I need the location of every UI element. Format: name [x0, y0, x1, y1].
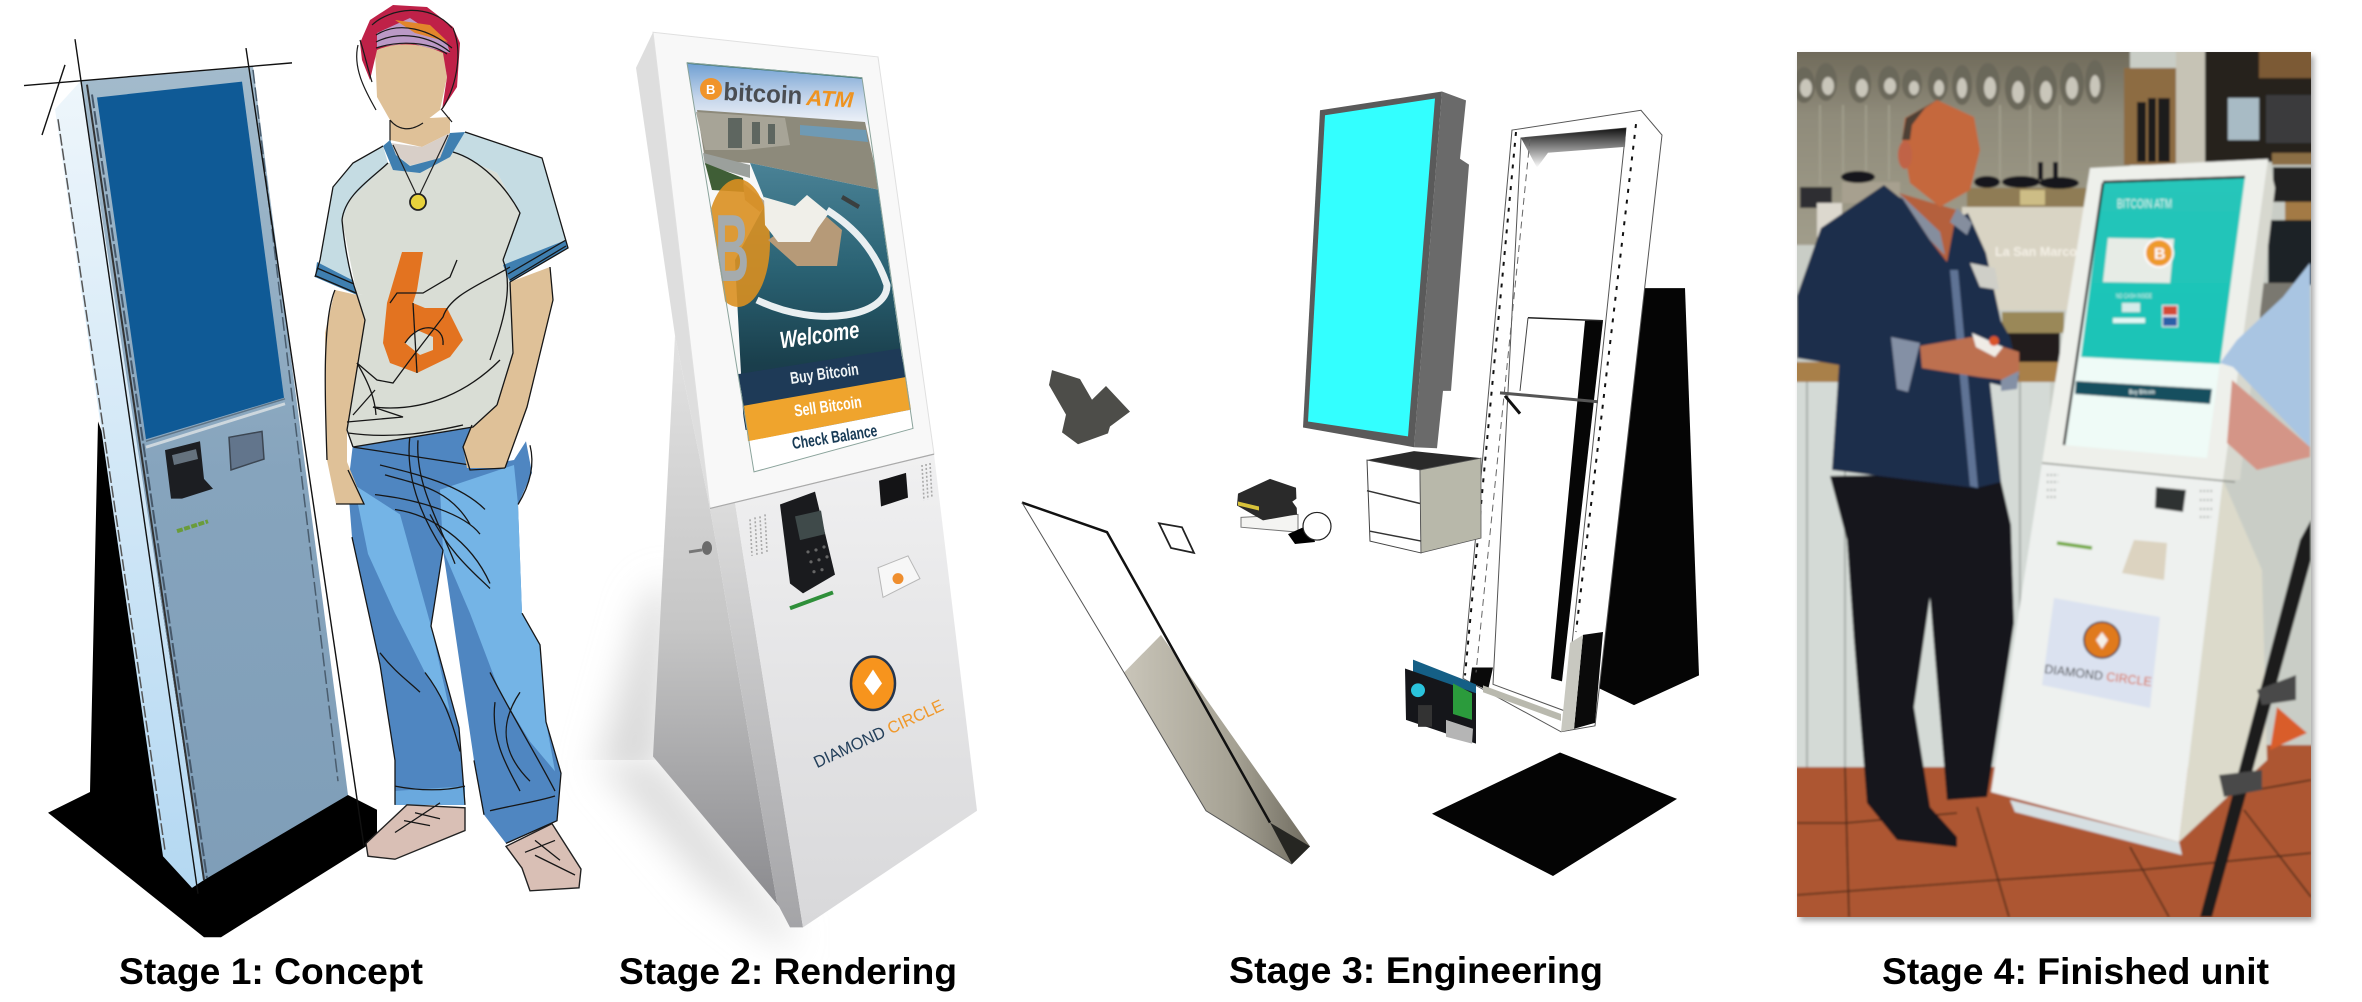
- hanging wine glasses: [1793, 60, 2105, 110]
- nfc reader: [879, 473, 908, 506]
- diamond circle wordmark: DIAMOND CIRCLE: [811, 696, 946, 772]
- hair and headband: [360, 5, 460, 110]
- necklace pendant: [393, 135, 448, 210]
- dark cabinet: [2205, 50, 2315, 162]
- photo scene: [1790, 45, 2320, 925]
- pants and shoes: [348, 421, 581, 891]
- lower kiosk hardware: [689, 463, 946, 772]
- sell bitcoin button: Sell Bitcoin: [793, 392, 863, 421]
- speaker grilles: [750, 463, 932, 556]
- espresso machine: La San Marco: [1995, 244, 2077, 259]
- receipt printer: [1237, 479, 1331, 544]
- buy bitcoin button: Buy Bitcoin: [789, 360, 860, 388]
- black rear shell: [1597, 288, 1699, 705]
- bitcoin ATM header: bitcoin: [723, 78, 803, 110]
- kiosk wall and floor shadow: [595, 580, 790, 950]
- receipt tray: [2122, 540, 2167, 580]
- welcome text: Welcome: [778, 317, 861, 354]
- white frame: [1463, 110, 1662, 732]
- photo shadow: [1800, 56, 2314, 921]
- reader display: [172, 449, 198, 465]
- check balance button: Check Balance: [791, 421, 879, 453]
- bitcoin ATM header: ATM: [805, 85, 855, 112]
- sketched kiosk: [24, 39, 377, 937]
- panel: stage 2 rendering: [619, 32, 977, 992]
- black pots and bottles: [1841, 162, 2079, 189]
- sketch construction lines: [24, 39, 364, 894]
- green card slot: [790, 592, 833, 608]
- kiosk screen: B: [2154, 246, 2166, 263]
- bar counter: [1790, 362, 2060, 382]
- orange cone: [2270, 707, 2307, 750]
- panel: stage 4 finished unit photo: [1790, 45, 2320, 992]
- kiosk screen: NO CASH INSIDE: [2116, 294, 2152, 300]
- opera house platform: [768, 217, 842, 266]
- neck and face: [375, 41, 450, 147]
- kiosk touchscreen photo: [687, 63, 915, 430]
- orange logo: [383, 252, 463, 373]
- stage 1 label: Stage 1: Concept: [119, 951, 423, 992]
- card reader: [165, 441, 213, 499]
- electronics module: [1405, 660, 1476, 744]
- key in lock: [689, 541, 712, 555]
- pin pad reader: [780, 492, 835, 593]
- small card part: [1159, 523, 1194, 553]
- receipt tray: [878, 556, 920, 597]
- printer box: [1367, 451, 1481, 553]
- stage 3 label: Stage 3: Engineering: [1229, 950, 1603, 991]
- kiosk buttons: [687, 63, 913, 472]
- kiosk screen: BITCOIN ATM: [2117, 196, 2172, 211]
- finished kiosk: [1991, 159, 2275, 855]
- rendered kiosk: [636, 32, 977, 927]
- kiosk screen: [2064, 177, 2245, 458]
- green card slot: [177, 521, 208, 531]
- black rear sliver: [1551, 321, 1603, 681]
- espresso machine: [1800, 182, 2087, 363]
- green slot: [2057, 543, 2092, 548]
- t-shirt: [342, 152, 520, 447]
- panel: stage 3 engineering: [1022, 92, 1699, 991]
- panel: stage 1 concept: [24, 5, 581, 992]
- harbour ferry: [841, 195, 860, 209]
- boat wake: [757, 210, 887, 316]
- bitcoin watermark coin: [706, 179, 770, 307]
- bitcoin logo coin: [700, 78, 722, 100]
- door panel: [1022, 503, 1310, 864]
- terracotta floor: [1790, 767, 2320, 922]
- diamond circle sticker: [2042, 598, 2160, 708]
- bystander arm: [2220, 263, 2310, 470]
- sketch outlines: [315, 132, 568, 504]
- diamond circle logo: [851, 657, 895, 710]
- wine shelf: [2124, 68, 2176, 165]
- bitcoin ATM header: [723, 78, 855, 112]
- stage 2 label: Stage 2: Rendering: [619, 951, 957, 992]
- back wall: [1790, 45, 2130, 245]
- diamond circle sticker: DIAMOND CIRCLE: [2044, 662, 2153, 689]
- nfc reader: [2155, 487, 2186, 512]
- bitcoin logo coin: B: [706, 82, 715, 97]
- black base plate: [1432, 752, 1677, 876]
- speaker grilles: [2047, 475, 2213, 517]
- stage 4 label: Stage 4: Finished unit: [1882, 951, 2269, 992]
- opera house sails: [764, 195, 829, 242]
- monitor: [1303, 92, 1469, 448]
- camera tripod: [2200, 520, 2311, 917]
- kiosk screen: Buy Bitcoin: [2129, 390, 2155, 396]
- man: [1797, 100, 2019, 847]
- sketched person: [315, 5, 581, 891]
- keypad bracket: [1049, 370, 1130, 444]
- kiosk touchscreen photo: B: [715, 195, 749, 302]
- arms and hands: [325, 267, 553, 504]
- receipt slot: [229, 431, 264, 470]
